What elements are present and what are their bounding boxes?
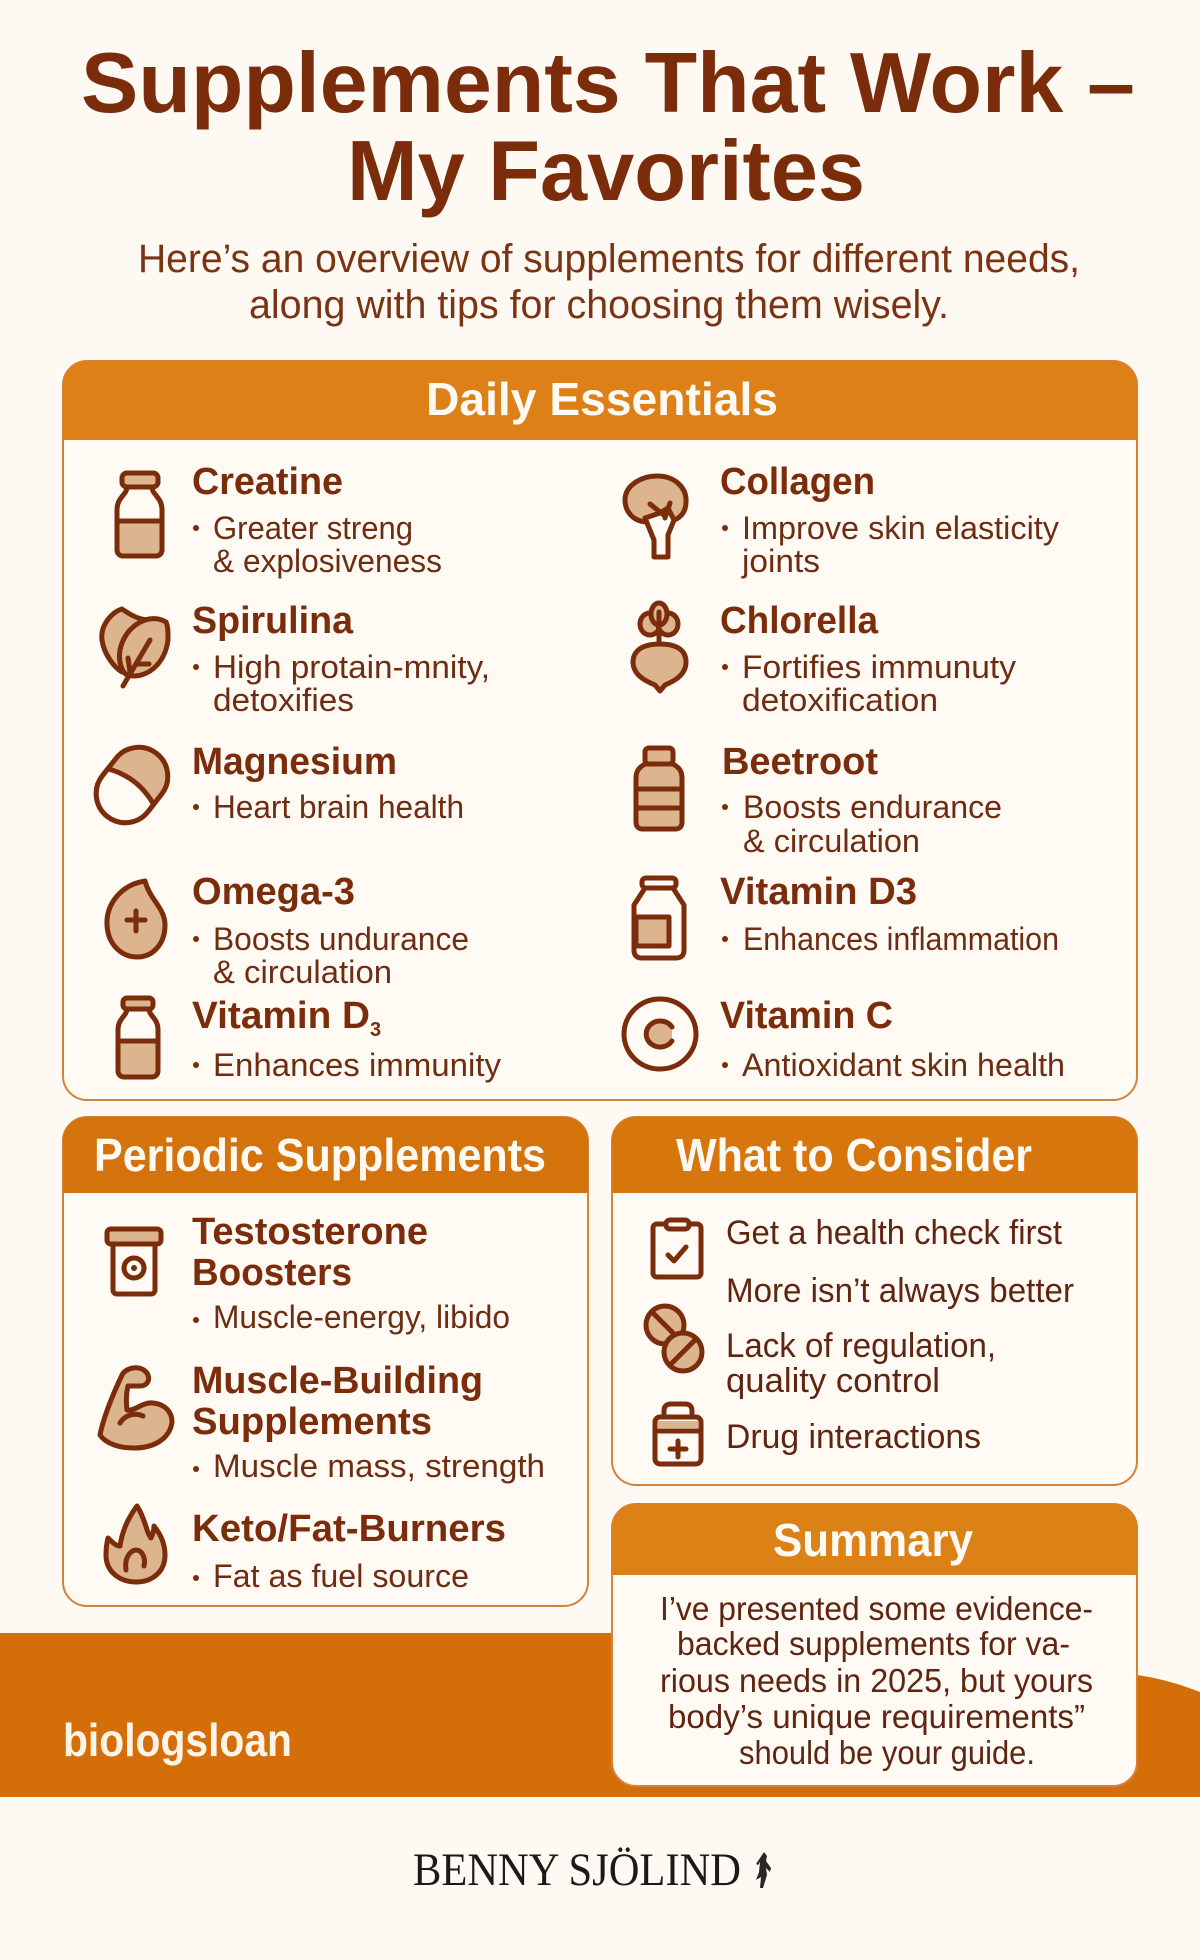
item: magnesium: Heart brain health	[213, 789, 464, 825]
icon: magnesium capsule	[85, 736, 179, 834]
item: creatine	[117, 461, 442, 579]
subtitle: along with tips for choosing them wisely.	[249, 283, 949, 327]
text: health check: Get a health check first	[726, 1214, 1063, 1252]
title: Supplements That Work –	[81, 36, 1135, 131]
title: My Favorites	[347, 124, 865, 219]
item: vitamin d3 left	[118, 995, 501, 1083]
item: vitamin c	[624, 995, 1065, 1083]
icon: vitamin d3 jar	[634, 878, 684, 958]
item: keto fat-burners: Keto/Fat-Burners	[192, 1508, 506, 1550]
item: omega-3	[107, 871, 469, 990]
item: magnesium	[85, 736, 464, 834]
item: collagen: Improve skin elasticity	[742, 510, 1059, 546]
item: keto fat-burners: Fat as fuel source	[213, 1558, 469, 1594]
text: lack of regulation	[726, 1327, 996, 1400]
heading: periodic supplements	[63, 1117, 588, 1193]
item: testosterone boosters: Muscle-energy, libido	[213, 1299, 510, 1335]
summary text: body’s unique requirements”	[668, 1698, 1085, 1735]
title	[81, 36, 1135, 219]
item: collagen	[625, 461, 1059, 579]
item: muscle-building supplements: Muscle mass, strength	[213, 1448, 545, 1484]
icon: clipboard	[653, 1220, 701, 1277]
icon: flexed arm	[100, 1368, 172, 1448]
item: vitamin d3 right: Enhances inflammation	[743, 921, 1059, 957]
heading: periodic supplements: Periodic Supplements	[94, 1129, 546, 1181]
item: testosterone boosters: Boosters	[192, 1252, 352, 1294]
icon: medicine jar	[655, 1404, 701, 1464]
item: chlorella: detoxification	[742, 682, 938, 718]
summary text: I’ve presented some evidence-	[660, 1590, 1093, 1627]
icon: spirulina leaves	[102, 609, 168, 686]
icon: testosterone jar	[107, 1229, 161, 1294]
icon: vitamin d3 bottle	[118, 998, 158, 1077]
heading: summary	[612, 1504, 1137, 1575]
summary text: rious needs in 2025, but yours	[660, 1662, 1093, 1699]
summary text: should be your guide.	[739, 1734, 1035, 1771]
item: spirulina: Spirulina	[192, 600, 354, 642]
item: vitamin c: Antioxidant skin health	[742, 1047, 1065, 1083]
item: vitamin d3 left: Vitamin D	[192, 995, 370, 1037]
item: creatine: Creatine	[192, 461, 343, 503]
item: vitamin c: Vitamin C	[720, 995, 893, 1037]
text: lack of regulation: quality control	[726, 1362, 940, 1400]
icon: beetroot bottle	[636, 748, 682, 829]
item: beetroot	[636, 741, 1002, 859]
icon: creatine bottle	[117, 473, 162, 556]
heading: summary: Summary	[773, 1514, 973, 1566]
summary text	[660, 1590, 1093, 1771]
item: spirulina: detoxifies	[213, 682, 354, 718]
item: vitamin d3 right	[634, 871, 1059, 958]
item: chlorella: Fortifies immunuty	[742, 649, 1016, 685]
author signature: BENNY SJÖLIND	[413, 1844, 741, 1896]
item: vitamin d3 right: Vitamin D3	[720, 871, 917, 913]
icon: collagen	[625, 476, 686, 557]
text: drug interactions: Drug interactions	[726, 1418, 981, 1456]
subtitle	[138, 237, 1080, 327]
item: collagen: Collagen	[720, 461, 875, 503]
summary text: backed supplements for va-	[677, 1625, 1070, 1662]
item: muscle-building supplements	[100, 1360, 545, 1484]
item: omega-3: Omega-3	[192, 871, 355, 913]
panel: summary	[612, 1504, 1137, 1786]
icon: runner	[756, 1852, 771, 1888]
heading: daily essentials	[63, 361, 1137, 440]
item: collagen: joints	[741, 543, 820, 579]
item: vitamin d3 left: 3	[370, 1019, 381, 1041]
text: lack of regulation: Lack of regulation,	[726, 1327, 996, 1365]
orange footer band	[0, 1633, 1200, 1797]
icon: flame	[106, 1506, 165, 1582]
item: chlorella: Chlorella	[720, 600, 879, 642]
heading: daily essentials: Daily Essentials	[426, 373, 778, 425]
item: testosterone boosters: Testosterone	[192, 1211, 428, 1253]
item: spirulina	[102, 600, 490, 718]
text: more is not better: More isn’t always better	[726, 1272, 1074, 1310]
item: beetroot: Beetroot	[722, 741, 878, 783]
panel: periodic supplements	[63, 1117, 588, 1606]
icon: pills	[646, 1306, 702, 1371]
brand: biologsloan: biologsloan	[63, 1714, 292, 1766]
item: creatine: Greater streng	[213, 510, 413, 546]
item: spirulina: High protain-mnity,	[213, 649, 490, 685]
item: vitamin d3 left: Enhances immunity	[213, 1047, 501, 1083]
item: testosterone boosters	[107, 1211, 510, 1335]
item: muscle-building supplements: Supplements	[192, 1401, 432, 1443]
heading: what to consider: What to Consider	[676, 1129, 1032, 1181]
item: beetroot: Boosts endurance	[743, 789, 1002, 825]
icon: omega-3 drop	[107, 881, 165, 957]
heading: what to consider	[612, 1117, 1137, 1193]
icon: chlorella beet	[633, 603, 686, 691]
panel: daily essentials	[63, 361, 1137, 1100]
item: beetroot: & circulation	[743, 823, 920, 859]
panel: what to consider	[612, 1117, 1137, 1485]
item: creatine: & explosiveness	[213, 543, 442, 579]
item: keto fat-burners	[106, 1506, 506, 1594]
icon: vitamin c circle	[624, 999, 696, 1069]
subtitle: Here’s an overview of supplements for different needs,	[138, 237, 1080, 281]
item: muscle-building supplements: Muscle-Building	[192, 1360, 483, 1402]
item: chlorella	[633, 600, 1016, 718]
item: magnesium: Magnesium	[192, 741, 397, 783]
item: omega-3: & circulation	[213, 954, 392, 990]
item: omega-3: Boosts undurance	[213, 921, 469, 957]
